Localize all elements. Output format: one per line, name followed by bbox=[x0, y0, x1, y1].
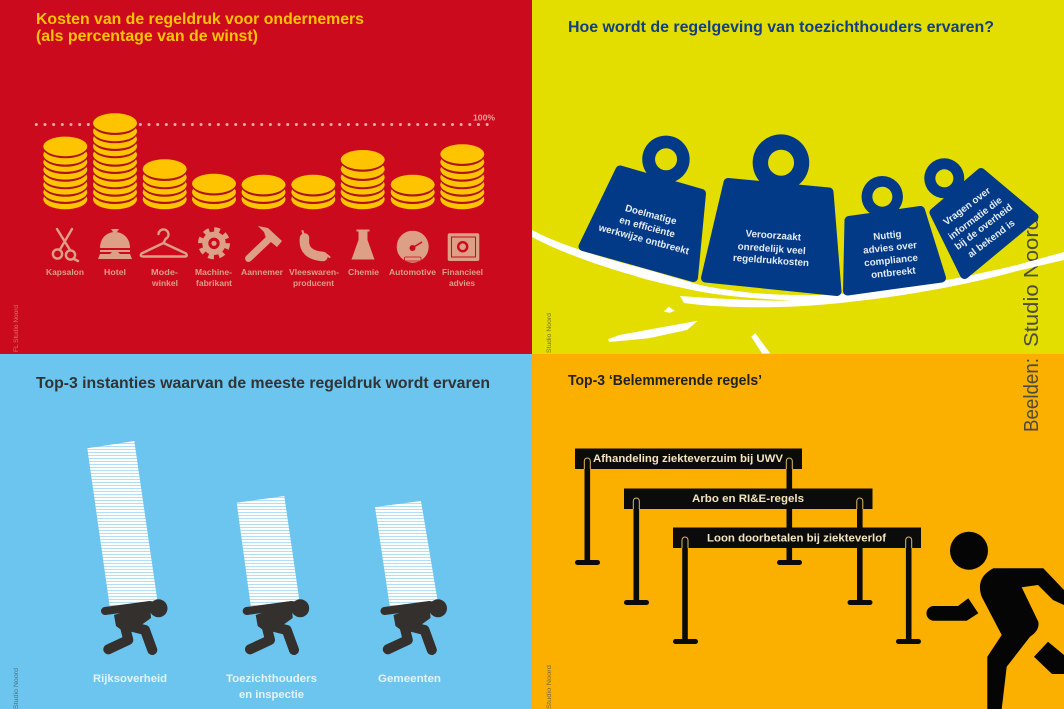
coin stack: Machinefabrikant bbox=[192, 174, 236, 209]
coin stack: Modewinkel bbox=[143, 159, 187, 209]
panel: top-3 instanties bbox=[0, 354, 532, 709]
sector labels: winkel bbox=[151, 278, 178, 288]
weight: Doelmatige en efficiënte werkwijze ontbreekt: en efficiënte bbox=[618, 215, 677, 241]
icon: flask bbox=[352, 230, 374, 260]
heading: belemmerende regels: Top-3 ‘Belemmerende regels’ bbox=[568, 372, 762, 389]
sector labels: Kapsalon bbox=[46, 267, 84, 277]
icon: sausage bbox=[302, 231, 330, 257]
weight: Vragen over informatie die bij de overheid al bekend is: informatie die bbox=[947, 195, 1005, 243]
weight: Doelmatige en efficiënte werkwijze ontbreekt: werkwijze ontbreekt bbox=[596, 222, 691, 258]
sector labels: Hotel bbox=[104, 267, 126, 277]
weight: Doelmatige en efficiënte werkwijze ontbreekt: Doelmatige bbox=[624, 203, 678, 228]
weight: Vragen over informatie die bij de overheid al bekend is: Vragen over bbox=[942, 185, 993, 228]
burden: Toezichthouders en inspectie bbox=[226, 496, 317, 701]
100% reference line: 100% bbox=[473, 112, 495, 122]
credit: Studio Noord: Studio Noord bbox=[546, 313, 553, 353]
coin stack: Chemie bbox=[341, 150, 385, 209]
icon: clothes hanger bbox=[141, 229, 187, 256]
weight: Veroorzaakt onredelijk veel regeldrukkosten bbox=[706, 134, 837, 292]
photo credit: Beelden Studio Noord bbox=[1021, 218, 1043, 432]
icon: scissors bbox=[53, 229, 78, 261]
burden: Toezichthouders en inspectie: en inspectie bbox=[239, 689, 304, 701]
panel: kosten van de regeldruk bbox=[0, 0, 532, 354]
photo credit: Beelden Studio Noord: Studio Noord bbox=[1021, 218, 1043, 347]
weight: Veroorzaakt onredelijk veel regeldrukkosten: regeldrukkosten bbox=[733, 253, 809, 269]
hurdle: Afhandeling ziekteverzuim bij UWV bbox=[575, 448, 802, 565]
coin stack: Automotive bbox=[391, 175, 435, 209]
icon: gear bbox=[200, 230, 228, 257]
sector labels: Automotive bbox=[389, 267, 436, 277]
panel: top-3 belemmerende regels bbox=[532, 354, 1064, 709]
sector labels: Aannemer bbox=[241, 267, 284, 277]
heading: kosten van de regeldruk: (als percentage van de winst) bbox=[36, 28, 258, 45]
coin stack: Hotel bbox=[93, 113, 137, 209]
weight: Veroorzaakt onredelijk veel regeldrukkosten: Veroorzaakt bbox=[745, 229, 802, 243]
sector labels: Vleeswaren- bbox=[289, 267, 339, 277]
icon: safe bbox=[448, 233, 479, 261]
hurdle: Loon doorbetalen bij ziekteverlof: Loon doorbetalen bij ziekteverlof bbox=[707, 532, 886, 544]
heading: kosten van de regeldruk bbox=[36, 11, 364, 45]
coin stack: Vleeswarenproducent bbox=[291, 175, 335, 209]
weight: Nuttig advies over compliance ontbreekt: advies over bbox=[863, 240, 918, 257]
hurdle: Loon doorbetalen bij ziekteverlof bbox=[673, 528, 921, 644]
hurdle: Arbo en RI&E-regels: Arbo en RI&E-regels bbox=[692, 493, 804, 505]
hurdle: Afhandeling ziekteverzuim bij UWV: Afhandeling ziekteverzuim bij UWV bbox=[593, 453, 784, 465]
coin stack: Aannemer bbox=[242, 175, 286, 209]
icon: running person bbox=[926, 532, 1064, 709]
credit: Studio Noord: FL Studio Noord bbox=[13, 305, 20, 352]
weight: Vragen over informatie die bij de overheid al bekend is: al bekend is bbox=[966, 218, 1018, 260]
burden: Rijksoverheid bbox=[87, 441, 168, 685]
weight: Nuttig advies over compliance ontbreekt: Nuttig bbox=[873, 229, 902, 243]
panel: regelgeving toezichthouders bbox=[532, 0, 1064, 432]
heading: top-3 instanties: Top-3 instanties waarvan de meeste regeldruk wordt ervaren bbox=[36, 375, 490, 392]
weight: Vragen over informatie die bij de overheid al bekend is bbox=[924, 158, 1034, 274]
sector labels: advies bbox=[449, 278, 475, 288]
heading: kosten van de regeldruk: Kosten van de regeldruk voor ondernemers bbox=[36, 11, 364, 28]
sector labels: fabrikant bbox=[196, 278, 232, 288]
weight: Nuttig advies over compliance ontbreekt: ontbreekt bbox=[871, 265, 917, 281]
sector labels bbox=[46, 267, 483, 288]
heading: regelgeving toezichthouders: Hoe wordt de regelgeving van toezichthouders ervaren? bbox=[568, 19, 994, 36]
weight: Nuttig advies over compliance ontbreekt: compliance bbox=[864, 253, 919, 269]
hurdle: Arbo en RI&E-regels bbox=[624, 488, 872, 605]
coin stack: Financieel advies bbox=[440, 144, 484, 209]
sector labels: Mode- bbox=[151, 267, 178, 277]
icon: speedometer bbox=[397, 231, 429, 263]
weight: Vragen over informatie die bij de overheid al bekend is: bij de overheid bbox=[953, 202, 1015, 252]
credit: Studio Noord: Studio Noord bbox=[546, 665, 553, 709]
burden: Gemeenten bbox=[375, 501, 447, 685]
sector labels: Financieel bbox=[442, 267, 483, 277]
burden: Rijksoverheid: Rijksoverheid bbox=[93, 673, 167, 685]
sector labels: producent bbox=[293, 278, 334, 288]
weight: Doelmatige en efficiënte werkwijze ontbreekt bbox=[583, 136, 702, 278]
photo credit: Beelden Studio Noord: Beelden: bbox=[1021, 358, 1043, 432]
weight: Veroorzaakt onredelijk veel regeldrukkosten: onredelijk veel bbox=[737, 241, 806, 257]
credit: Studio Noord: Studio Noord bbox=[13, 668, 20, 709]
sector labels: Chemie bbox=[348, 267, 379, 277]
sector labels: Machine- bbox=[195, 267, 232, 277]
burden: Gemeenten: Gemeenten bbox=[378, 673, 441, 685]
coin stack: Kapsalon bbox=[43, 137, 87, 209]
weight: Nuttig advies over compliance ontbreekt bbox=[848, 176, 942, 291]
icon: hotel bell bbox=[98, 229, 132, 259]
icon: hammer bbox=[245, 226, 282, 262]
white bending line bbox=[532, 230, 1064, 354]
burden: Toezichthouders en inspectie: Toezichthouders bbox=[226, 673, 317, 685]
